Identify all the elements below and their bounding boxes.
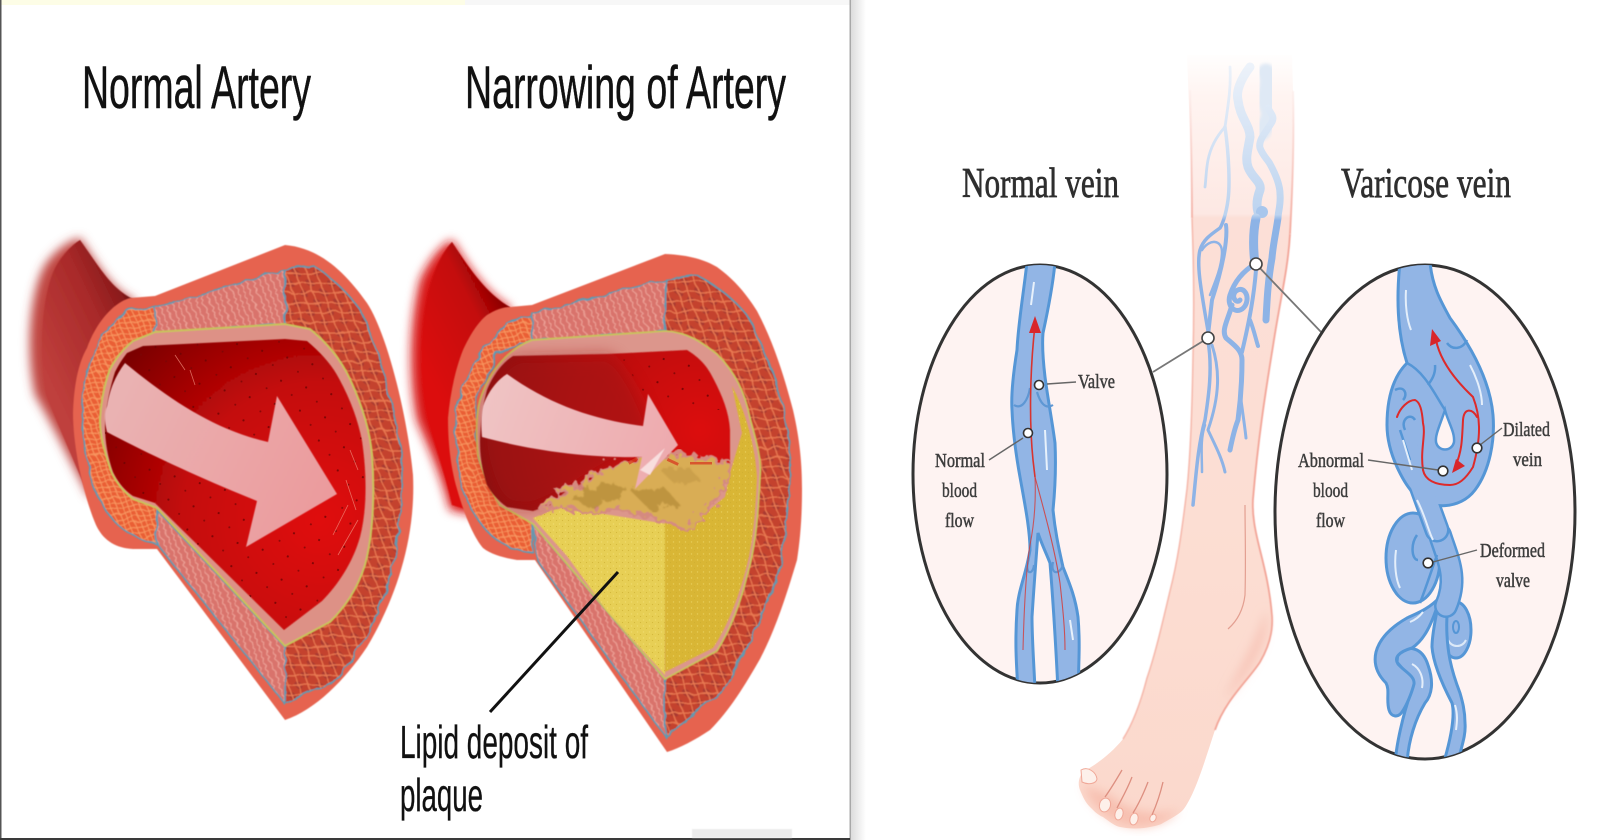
- panel: normal vein detail: [913, 262, 1167, 690]
- plaque: yellow right face: [665, 386, 757, 672]
- outer wall: [448, 254, 802, 752]
- upper leg edges: [1190, 90, 1293, 234]
- lumen: [480, 350, 730, 511]
- label: abnormal blood flow: flow: [1316, 510, 1345, 532]
- artery tube soft edge: [30, 238, 135, 500]
- spiral cluster: [1229, 264, 1255, 310]
- toes: [1081, 769, 1180, 827]
- plaque red streaks: [628, 457, 712, 466]
- branching veins: [1193, 67, 1280, 505]
- back of leg edge: [1215, 234, 1290, 730]
- heading: Varicose vein: Varicose vein: [1341, 161, 1511, 207]
- left curl: [1386, 513, 1440, 603]
- abnormal red flow: [1397, 340, 1479, 485]
- connector: varicose vein: [1256, 264, 1322, 333]
- heading: Narrowing of Artery: Narrowing of Artery: [465, 54, 786, 121]
- blood flow leader: [989, 438, 1023, 460]
- highlights: [1031, 282, 1073, 640]
- ankle crease: [1228, 505, 1245, 629]
- label: lipid deposit of plaque: [400, 716, 588, 821]
- label: lipid deposit of plaque: plaque: [400, 769, 483, 821]
- inner folds: [1395, 340, 1467, 603]
- plaque grain right: [665, 386, 757, 672]
- illustration: normal artery cross-section: [30, 238, 413, 720]
- nails: [1098, 797, 1112, 813]
- flow arrow: [105, 363, 337, 547]
- flow arrow: [481, 374, 678, 489]
- label: normal blood flow: [935, 450, 985, 532]
- plaque: yellow left face: [533, 507, 667, 675]
- label: normal blood flow: flow: [945, 510, 974, 532]
- heading: Normal vein: Normal vein: [962, 161, 1119, 207]
- intima ring: [477, 331, 760, 679]
- tortuous vein: [1375, 262, 1493, 765]
- marker: blood flow: [1024, 428, 1032, 438]
- label: lipid deposit of plaque: Lipid deposit of: [400, 716, 588, 768]
- vein: [1012, 262, 1079, 690]
- s-shaped strand: [1395, 648, 1432, 765]
- knot: [1256, 206, 1268, 218]
- callout: lipid deposit pointer: [490, 572, 618, 712]
- illustration: leg: [1079, 55, 1293, 828]
- label: deformed valve: valve: [1496, 570, 1530, 592]
- leaders: [1368, 428, 1502, 562]
- label: abnormal blood flow: blood: [1313, 480, 1348, 502]
- red arrowhead: [1029, 316, 1041, 333]
- wall layers: [82, 265, 403, 704]
- label: normal blood flow: Normal: [935, 450, 985, 472]
- toe tips shading: [1083, 785, 1180, 827]
- connector: normal vein: [1153, 338, 1208, 372]
- plaque grain left: [533, 507, 667, 675]
- right strand: [1432, 592, 1465, 765]
- plaque: rough surface: [538, 453, 730, 530]
- marker: dilated vein: [1472, 443, 1482, 453]
- leg edge shading: [1123, 218, 1194, 739]
- pale bulge at top of thick vein: [1262, 72, 1269, 132]
- left veins lower: [1193, 341, 1210, 505]
- connecting segment: [1410, 491, 1464, 618]
- marker: deformed valve: [1423, 558, 1433, 568]
- lower strand to marker: [1254, 218, 1256, 264]
- arrow highlight: [640, 448, 665, 475]
- marker: leg normal vein point: [1202, 332, 1214, 344]
- toe clefts: [1105, 770, 1163, 815]
- opening in vein: [1436, 410, 1454, 450]
- left thin veins upper: [1205, 67, 1230, 187]
- lumen pits: [620, 352, 722, 410]
- lower-left blob: [1375, 597, 1440, 716]
- label: normal blood flow: blood: [942, 480, 977, 502]
- heel shading: [1225, 610, 1267, 700]
- red arrowheads: [1430, 329, 1441, 346]
- label: deformed valve: Deformed: [1480, 540, 1545, 562]
- thick wavy strand: [1260, 108, 1280, 320]
- lumen pits: [105, 339, 366, 630]
- label: abnormal blood flow: Abnormal: [1298, 450, 1364, 472]
- label: valve: Valve: [1078, 371, 1115, 393]
- curl detail: [1448, 621, 1466, 646]
- label: deformed valve: [1480, 540, 1545, 592]
- pale strand upper: [1238, 67, 1260, 212]
- artery tube: [421, 242, 510, 520]
- valve leader: [1047, 382, 1076, 384]
- highlights: [1395, 290, 1482, 730]
- marker: valve: [1034, 380, 1044, 390]
- label: abnormal blood flow: [1298, 450, 1364, 532]
- panel: artery background: [0, 0, 866, 840]
- label: dilated vein: [1503, 419, 1550, 471]
- plaque mottling: [570, 468, 700, 510]
- label: dilated vein: vein: [1513, 449, 1542, 471]
- heading: Normal Artery: Normal Artery: [82, 54, 311, 121]
- fibres: [175, 355, 358, 555]
- artery tube: [42, 240, 135, 505]
- panel: varicose vein detail: [1275, 262, 1575, 765]
- marker: leg varicose vein point: [1250, 258, 1262, 270]
- marker: abnormal flow: [1438, 466, 1448, 476]
- diagonal overlay: [1412, 489, 1447, 540]
- illustration: narrowed artery cross-section: [411, 240, 802, 752]
- shaded bulge: [482, 356, 655, 508]
- lumen: [105, 339, 366, 630]
- dilated upper vein: [1387, 262, 1493, 506]
- circle: [1275, 265, 1575, 759]
- red flow lines: [1023, 325, 1065, 650]
- wall layers: [455, 275, 790, 736]
- intima ring: [100, 324, 373, 646]
- outer wall: [73, 245, 413, 720]
- artery tube soft edge: [411, 240, 510, 520]
- big toe nail: [1081, 769, 1097, 784]
- circle: [913, 265, 1167, 683]
- label: dilated vein: Dilated: [1503, 419, 1550, 441]
- leg silhouette: [1079, 55, 1293, 828]
- valves: [1014, 388, 1063, 572]
- lower curl: [1448, 602, 1472, 660]
